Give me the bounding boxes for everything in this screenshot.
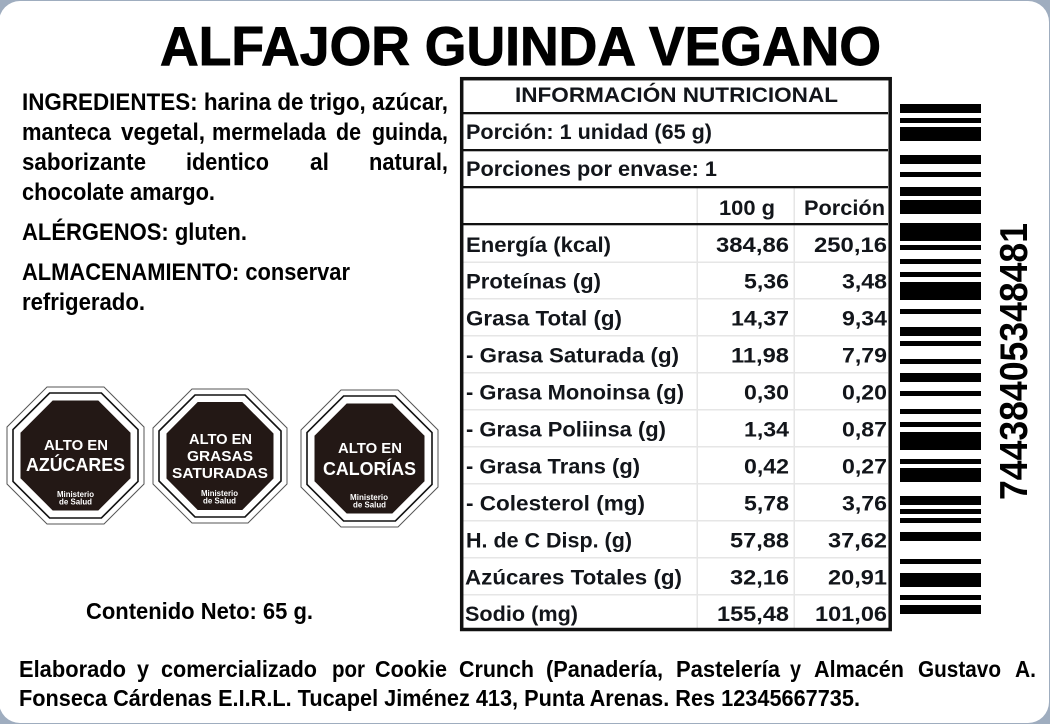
row: proteínas — [466, 270, 887, 294]
row: grasa saturada: - Grasa Saturada (g) — [466, 344, 679, 368]
row: azúcares totales: 32,16 — [730, 566, 789, 590]
ingredients text — [22, 89, 448, 206]
column headers: 100 g — [719, 197, 775, 220]
barcode — [900, 104, 981, 614]
row: colesterol: 5,78 — [744, 492, 789, 516]
warning seal: alto en azúcares: AZÚCARES — [26, 454, 125, 475]
row: grasa trans: - Grasa Trans (g) — [466, 456, 640, 478]
row: grasa trans: 0,42 — [744, 456, 789, 478]
storage text — [22, 259, 350, 316]
producer statement: Pastelería — [676, 656, 781, 682]
row: sodio — [465, 603, 887, 626]
storage text: refrigerado. — [22, 289, 145, 316]
row: grasa monoinsaturada — [466, 382, 887, 404]
producer statement — [19, 656, 1036, 711]
row: grasa monoinsaturada: 0,30 — [744, 382, 789, 404]
row: energía — [466, 234, 887, 257]
producer statement: y — [790, 656, 801, 682]
column headers: Porción — [804, 197, 885, 220]
producer statement: (Panadería, — [546, 656, 663, 682]
warning seal: alto en grasas saturadas: SATURADAS — [172, 466, 268, 482]
row: sodio: 155,48 — [717, 603, 789, 626]
producer statement: A. — [1015, 656, 1036, 682]
row: grasa saturada: 7,79 — [842, 344, 887, 368]
ingredients text: manteca — [22, 119, 112, 146]
ingredients text: saborizante — [22, 149, 146, 176]
row: sodio: 101,06 — [815, 603, 887, 626]
row: energía: 250,16 — [814, 234, 887, 257]
allergens text: ALÉRGENOS: gluten. — [22, 218, 247, 246]
row: colesterol: - Colesterol (mg) — [466, 492, 645, 516]
ingredients text: INGREDIENTES: harina de trigo, azúcar, — [22, 89, 448, 116]
producer statement: Fonseca Cárdenas E.I.R.L. Tucapel Jiménez 413, Punta Arenas. Res 12345667735. — [19, 685, 860, 711]
warning seal: alto en grasas saturadas: GRASAS — [187, 449, 253, 465]
ingredients text: vegetal, — [121, 119, 205, 146]
column headers — [719, 197, 885, 220]
table heading: INFORMACIÓN NUTRICIONAL — [515, 83, 838, 107]
warning seal: alto en calorías — [301, 390, 438, 527]
storage text: ALMACENAMIENTO: conservar — [22, 259, 350, 286]
warning seal: alto en calorías: de Salud — [353, 500, 386, 510]
row: proteínas: 3,48 — [842, 270, 887, 294]
row: grasa total: Grasa Total (g) — [466, 308, 622, 330]
ingredients text: identico — [186, 149, 269, 176]
producer statement: Cookie — [375, 656, 447, 682]
ingredients text: natural, — [369, 149, 448, 176]
row: grasa monoinsaturada: 0,20 — [842, 382, 887, 404]
row: grasa poliinsaturada: - Grasa Poliinsa (g) — [466, 418, 666, 442]
row: sodio: Sodio (mg) — [465, 603, 578, 626]
nutrition table — [462, 79, 890, 629]
ingredients text: chocolate amargo. — [22, 179, 215, 206]
warning seal: alto en calorías: CALORÍAS — [323, 458, 416, 479]
row: grasa monoinsaturada: - Grasa Monoinsa (g) — [466, 382, 684, 404]
ingredients text: al — [310, 149, 329, 176]
row: proteínas: Proteínas (g) — [466, 270, 601, 294]
warning seal: alto en grasas saturadas: de Salud — [203, 496, 236, 506]
row: azúcares totales: 20,91 — [828, 566, 887, 590]
title: ALFAJOR GUINDA VEGANO — [160, 15, 881, 77]
row: grasa poliinsaturada: 0,87 — [842, 418, 887, 442]
row: grasa saturada: 11,98 — [731, 344, 789, 368]
warning seal: alto en azúcares: ALTO EN — [44, 438, 108, 454]
ingredients text: mermelada — [212, 119, 327, 146]
row: colesterol: 3,76 — [842, 492, 887, 516]
serving size: Porción: 1 unidad (65 g) — [466, 121, 712, 144]
row: hidratos de carbono: 57,88 — [730, 530, 789, 552]
row: hidratos de carbono — [466, 530, 887, 552]
producer statement: por — [332, 656, 365, 682]
warning seal: alto en azúcares — [7, 387, 144, 524]
ingredients text: guinda, — [372, 119, 448, 146]
row: colesterol — [466, 492, 887, 516]
row: hidratos de carbono: 37,62 — [828, 530, 887, 552]
warning seal: alto en grasas saturadas: ALTO EN — [189, 432, 252, 448]
row: grasa trans: 0,27 — [842, 456, 887, 478]
warning seal: alto en calorías: Ministerio — [350, 493, 388, 502]
row: grasa saturada — [466, 344, 887, 368]
producer statement: y — [137, 656, 149, 682]
row: grasa total: 14,37 — [731, 308, 789, 330]
row: grasa poliinsaturada: 1,34 — [744, 418, 789, 442]
warning seal: alto en azúcares: Ministerio — [57, 490, 94, 499]
row: hidratos de carbono: H. de C Disp. (g) — [466, 530, 632, 552]
row: grasa total — [466, 308, 887, 330]
row: energía: Energía (kcal) — [466, 234, 611, 257]
servings per container: Porciones por envase: 1 — [466, 158, 717, 181]
warning seal: alto en azúcares: de Salud — [59, 498, 92, 506]
producer statement: Elaborado — [19, 656, 126, 682]
row: azúcares totales — [465, 566, 887, 590]
producer statement: Almacén — [814, 656, 904, 682]
warning seal: alto en calorías: ALTO EN — [338, 441, 402, 457]
row: azúcares totales: Azúcares Totales (g) — [465, 566, 682, 590]
row: grasa total: 9,34 — [842, 308, 887, 330]
producer statement: Crunch — [459, 656, 534, 682]
ingredients text: de — [336, 119, 361, 146]
row: energía: 384,86 — [716, 234, 789, 257]
producer statement: Gustavo — [918, 656, 1001, 682]
row: proteínas: 5,36 — [744, 270, 789, 294]
net content: Contenido Neto: 65 g. — [86, 598, 313, 624]
warning seal: alto en grasas saturadas: Ministerio — [201, 489, 238, 498]
row: grasa trans — [466, 456, 887, 478]
producer statement: comercializado — [161, 656, 317, 682]
row: grasa poliinsaturada — [466, 418, 887, 442]
barcode number: 74438405348481 — [993, 223, 1036, 500]
warning seal: alto en grasas saturadas — [153, 389, 287, 523]
